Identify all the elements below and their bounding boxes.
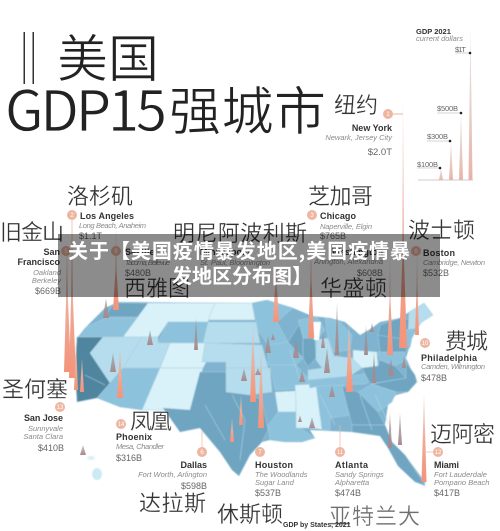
city: Washington: 华盛顿 bbox=[320, 271, 387, 303]
city: San Jose bbox=[2, 372, 68, 453]
city: Atlanta: 11 bbox=[337, 450, 344, 456]
city: Houston: 7 bbox=[258, 450, 262, 456]
title: 强城市 bbox=[169, 70, 326, 145]
legend: GDP spike scale: $1T bbox=[455, 45, 466, 54]
city: Philadelphia bbox=[420, 324, 488, 383]
city: Miami: Miami bbox=[434, 460, 459, 470]
city: Dallas: Dallas bbox=[180, 460, 207, 470]
city: Miami: 12 bbox=[435, 450, 442, 456]
city: Chicago bbox=[307, 179, 373, 241]
city: Minneapolis bbox=[173, 216, 307, 267]
city: San Francisco bbox=[0, 215, 71, 296]
legend: GDP spike scale: current dollars bbox=[416, 34, 463, 43]
city: San Francisco: $669B bbox=[35, 286, 61, 296]
city: Chicago: Naperville, Elgin bbox=[320, 222, 372, 231]
headline overlay band: 发地区分布图】 bbox=[172, 260, 312, 289]
city: Houston: 休斯顿 bbox=[217, 497, 283, 529]
city: Dallas bbox=[138, 430, 207, 518]
city: San Jose: 圣何塞 bbox=[2, 372, 68, 404]
city: Atlanta: Alpharetta bbox=[334, 478, 369, 487]
city: Boston: 8 bbox=[414, 249, 418, 255]
city: Philadelphia: 10 bbox=[422, 341, 429, 347]
city: Chicago: 3 bbox=[310, 213, 314, 219]
city: San Francisco: San bbox=[43, 247, 60, 257]
city: Boston: $532B bbox=[423, 268, 449, 278]
city: Chicago: Chicago bbox=[320, 211, 356, 221]
city: Phoenix: $316B bbox=[116, 453, 142, 463]
city: New York: 1 bbox=[386, 112, 390, 118]
city: New York bbox=[325, 88, 403, 158]
city: Houston: Houston bbox=[255, 460, 293, 470]
headline overlay band bbox=[58, 234, 440, 297]
legend: GDP spike scale: $500B bbox=[437, 104, 458, 113]
city: Miami: 迈阿密 bbox=[430, 417, 495, 449]
city: Dallas: 达拉斯 bbox=[139, 486, 206, 518]
city: Phoenix bbox=[116, 404, 172, 463]
city: Washington: $608B bbox=[357, 268, 383, 278]
city: New York: $2.0T bbox=[368, 147, 392, 158]
city: Minneapolis: Minneapolis bbox=[200, 247, 252, 257]
city: Los Angeles: Los Angeles bbox=[80, 211, 134, 221]
city: San Francisco: 5 bbox=[64, 249, 68, 255]
city: Seattle: Tacoma, Bellevue bbox=[125, 258, 170, 267]
city: Atlanta: Sandy Springs bbox=[335, 470, 384, 479]
city: Washington: Arlington, Alexandria bbox=[313, 257, 383, 266]
city: Atlanta: Atlanta bbox=[335, 460, 369, 470]
city: San Jose: Sunnyvale bbox=[28, 424, 63, 433]
city: Boston bbox=[408, 213, 485, 278]
city: Miami: $417B bbox=[434, 488, 460, 498]
city: Chicago: $765B bbox=[320, 231, 346, 241]
city: San Francisco: Oakland bbox=[33, 268, 62, 277]
city: Dallas: Fort Worth, Arlington bbox=[138, 470, 207, 479]
city: Phoenix: 凤凰 bbox=[130, 404, 172, 436]
title: GDP15 bbox=[5, 67, 167, 148]
map of US states bbox=[75, 300, 433, 486]
city: Phoenix: Phoenix bbox=[116, 432, 152, 442]
city: Chicago: 芝加哥 bbox=[308, 179, 373, 211]
city: New York: New York bbox=[352, 123, 393, 133]
city: Miami bbox=[424, 417, 495, 498]
city: San Jose: San Jose bbox=[24, 413, 63, 423]
city: Houston: $537B bbox=[255, 488, 281, 498]
state GDP spikes bbox=[64, 95, 426, 482]
city: Miami: Fort Lauderdale bbox=[434, 470, 487, 479]
headline overlay band: 关于【美国疫情暴发地区,美国疫情暴 bbox=[68, 235, 410, 264]
city: Minneapolis: St. Paul, Bloomington bbox=[200, 258, 270, 267]
city: Phoenix: 14 bbox=[118, 422, 125, 428]
legend: GDP spike scale: GDP 2021 bbox=[416, 27, 451, 36]
city: Los Angeles: 洛杉矶 bbox=[67, 179, 133, 211]
city: Houston: Sugar Land bbox=[255, 478, 295, 487]
city: San Francisco: Francisco bbox=[17, 257, 60, 267]
title: 美国 bbox=[57, 18, 159, 92]
city: Los Angeles bbox=[67, 179, 146, 250]
city: Los Angeles: $1.1T bbox=[79, 231, 103, 241]
city: Boston: Cambridge, Newton bbox=[423, 258, 485, 267]
city: Seattle bbox=[111, 246, 190, 303]
city: Philadelphia: Philadelphia bbox=[421, 353, 478, 363]
city: Philadelphia: 费城 bbox=[445, 324, 488, 356]
legend: GDP spike scale: $100B bbox=[417, 160, 438, 169]
city: Washington: Washington bbox=[332, 247, 383, 257]
city: Philadelphia: Camden, Wilmington bbox=[421, 362, 485, 371]
city: New York: 纽约 bbox=[334, 88, 378, 120]
city: Phoenix: Mesa, Chandler bbox=[116, 442, 164, 451]
city: San Jose: $410B bbox=[38, 443, 64, 453]
city: Boston: Boston bbox=[423, 248, 455, 258]
city: San Francisco: 旧金山 bbox=[0, 215, 64, 247]
city: San Francisco: Berkeley bbox=[32, 276, 62, 285]
city: Houston: The Woodlands bbox=[255, 470, 308, 479]
legend: GDP spike scale: $300B bbox=[427, 132, 448, 141]
city: San Jose: Santa Clara bbox=[23, 432, 63, 441]
city: Washington bbox=[313, 247, 387, 303]
city: Houston bbox=[217, 447, 308, 529]
city: Seattle: Seattle bbox=[125, 247, 155, 257]
city: Philadelphia: $478B bbox=[421, 373, 447, 383]
city: Atlanta: $474B bbox=[335, 488, 361, 498]
city: Dallas: $598B bbox=[181, 481, 207, 491]
city: Atlanta bbox=[329, 425, 420, 531]
city: Los Angeles: Long Beach, Anaheim bbox=[79, 221, 146, 230]
city: Los Angeles: 2 bbox=[70, 213, 74, 219]
city: Miami: Pompano Beach bbox=[434, 478, 489, 487]
city: Seattle: $480B bbox=[125, 268, 151, 278]
legend: GDP spike scale bbox=[416, 27, 473, 180]
city: Dallas: 6 bbox=[200, 450, 204, 456]
city: Atlanta: 亚特兰大 bbox=[329, 499, 420, 531]
city: Boston: 波士顿 bbox=[408, 213, 475, 245]
city: Minneapolis: 明尼阿波利斯 bbox=[173, 216, 307, 248]
city: Seattle: 9 bbox=[114, 249, 118, 255]
city: San Jose: 13 bbox=[57, 405, 64, 411]
city: Seattle: 西雅图 bbox=[124, 271, 190, 303]
title bbox=[5, 18, 326, 148]
map caption: GDP by States, 2021 bbox=[283, 522, 351, 529]
city: New York: Newark, Jersey City bbox=[325, 133, 393, 142]
